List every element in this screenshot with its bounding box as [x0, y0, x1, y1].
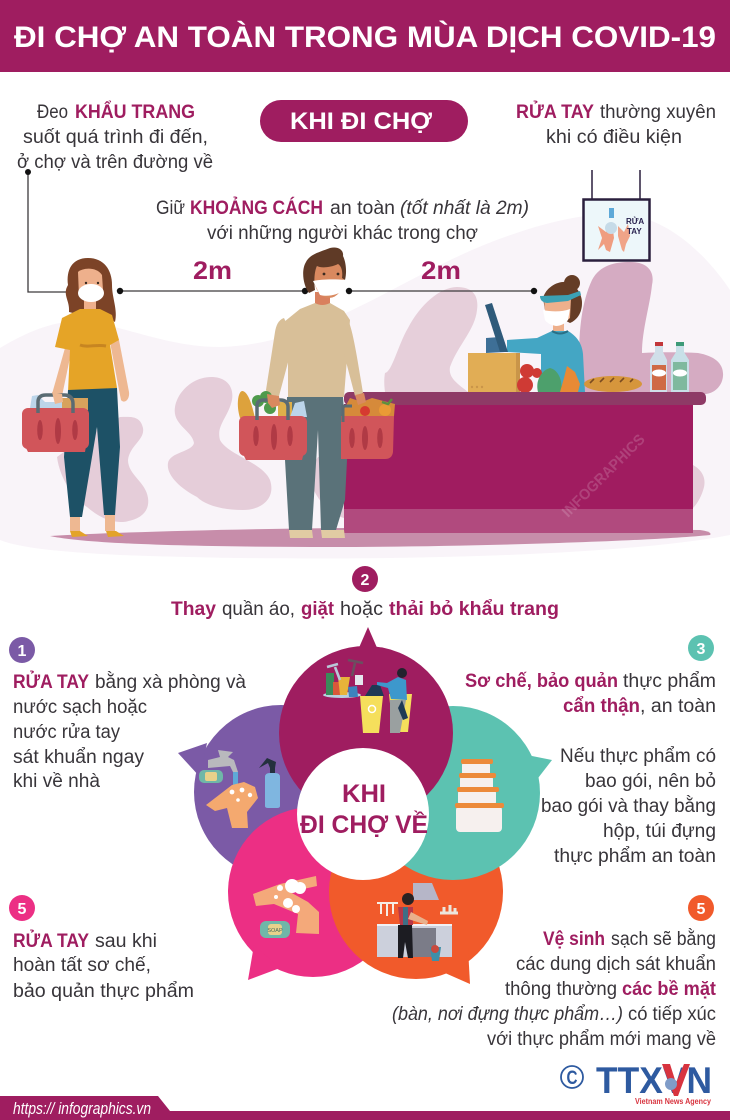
icon: hand washing sign — [584, 170, 650, 260]
text: wear mask: ở chợ và trên đường về — [17, 152, 213, 173]
text block: step 5 clean surfaces — [392, 895, 717, 1050]
center circle label: ĐI CHỢ VỀ — [300, 810, 428, 839]
icon: soapy hands — [253, 876, 319, 938]
petal: purple wash hands — [178, 705, 368, 879]
text block: step 5 wash hands after: sau khi — [95, 931, 157, 952]
text: keep distance — [156, 197, 529, 244]
text: wash hands: RỬA TAY — [516, 101, 594, 123]
heading: change clothes step 2: Thay — [171, 599, 216, 620]
heading: change clothes step 2: thải bỏ khẩu trang — [389, 599, 559, 620]
label: 2m left: 2m — [193, 257, 232, 285]
logo: TTXVN: TTXVN — [596, 1060, 712, 1101]
icon: soapy hands: SOAP — [267, 928, 283, 934]
text: keep distance: an toàn — [330, 198, 395, 219]
text: keep distance: KHOẢNG CÁCH — [190, 197, 323, 219]
icon: trash and person — [323, 660, 412, 733]
text: wash hands: khi có điều kiện — [546, 127, 682, 148]
icon: kitchen cleaning — [377, 883, 458, 961]
label: 2m right: 2m — [421, 257, 461, 285]
illustration: woman with basket — [22, 258, 129, 537]
diagram: five petal flower — [178, 627, 552, 984]
text: keep distance: (tốt nhất là 2m) — [400, 198, 529, 219]
text block: step 1 wash hands: nước rửa tay — [13, 722, 120, 743]
text: wear mask: KHẨU TRANG — [75, 101, 195, 123]
text: wash hands: thường xuyên — [600, 102, 716, 123]
text block: step 3 food prep: thực phẩm an toàn — [554, 846, 716, 867]
pill heading: khi đi chợ — [260, 100, 468, 142]
text block: step 1 wash hands: bằng xà phòng và — [95, 671, 246, 693]
pill heading: khi đi chợ: KHI ĐI CHỢ — [290, 108, 433, 135]
heading: change clothes step 2: quần áo, — [222, 599, 295, 620]
text block: step 3 food prep: bao gói và thay bằng — [541, 795, 716, 817]
text: wear mask — [17, 101, 213, 173]
text block: step 3 food prep: , an toàn — [640, 696, 716, 717]
logo: TTXVN: Vietnam News Agency — [635, 1097, 711, 1106]
text block: step 1 wash hands: nước sạch hoặc — [13, 697, 147, 718]
illustration: cashier — [468, 275, 689, 393]
text block: step 5 wash hands after: hoàn tất sơ chế, — [13, 955, 151, 976]
icon: hand washing sign: TAY — [627, 227, 642, 236]
text block: step 5 clean surfaces: các bề mặt — [622, 979, 717, 1000]
petal: orange cleaning — [329, 805, 503, 984]
center circle label — [297, 748, 429, 880]
text block: step 1 wash hands: 1 — [18, 643, 27, 660]
illustration: market counter — [344, 392, 706, 533]
text block: step 3 food prep — [465, 635, 716, 867]
heading: change clothes step 2: hoặc — [340, 599, 383, 620]
text block: step 3 food prep: thực phẩm — [623, 671, 716, 692]
text block: step 5 clean surfaces: các dung dịch sát khuẩn — [516, 954, 716, 975]
text block: step 5 clean surfaces: Vệ sinh — [543, 929, 605, 950]
icon: tap and soap — [199, 750, 280, 828]
text block: step 5 clean surfaces: (bàn, nơi đựng thực phẩm…) — [392, 1004, 623, 1025]
heading: change clothes step 2 — [171, 566, 559, 620]
text block: step 3 food prep: Sơ chế, bảo quản — [465, 671, 618, 692]
text block: step 1 wash hands: RỬA TAY — [13, 671, 89, 693]
text: wear mask: suốt quá trình đi đến, — [23, 127, 208, 148]
heading: change clothes step 2: giặt — [301, 599, 335, 620]
petal: pink wash hands — [228, 807, 398, 980]
text: keep distance: với những người khác trong chợ — [207, 223, 478, 244]
text block: step 5 clean surfaces: với thực phẩm mới mang về — [487, 1029, 716, 1050]
heading: change clothes step 2: 2 — [361, 572, 370, 589]
icon: hand washing sign: RỬA — [626, 217, 644, 226]
text: keep distance: Giữ — [156, 198, 185, 219]
text block: step 3 food prep: bao gói, nên bỏ — [585, 771, 716, 792]
text block: step 5 wash hands after — [9, 895, 194, 1002]
text block: step 1 wash hands: khi về nhà — [13, 771, 100, 792]
text block: step 1 wash hands — [9, 637, 246, 792]
floor shadow — [50, 528, 711, 547]
title banner — [0, 0, 730, 72]
text block: step 3 food prep: 3 — [697, 641, 706, 658]
petal: maroon dispose — [279, 627, 453, 820]
text block: step 5 clean surfaces: 5 — [697, 901, 706, 918]
text block: step 5 wash hands after: 5 — [18, 901, 27, 918]
text block: step 3 food prep: hộp, túi đựng — [603, 821, 716, 842]
logo: TTXVN — [561, 1060, 712, 1106]
text block: step 3 food prep: cẩn thận — [563, 696, 640, 717]
icon: food containers — [455, 759, 504, 832]
text: wash hands — [516, 101, 716, 148]
illustration: market counter: INFOGRAPHICS — [559, 431, 649, 521]
text block: step 5 clean surfaces: sạch sẽ bằng — [611, 928, 716, 950]
text block: step 3 food prep: Nếu thực phẩm có — [560, 746, 716, 767]
footer bar with url — [0, 1096, 730, 1120]
illustration: man with baskets — [238, 247, 395, 538]
text block: step 1 wash hands: sát khuẩn ngay — [13, 747, 145, 768]
scene background — [0, 214, 730, 558]
text block: step 5 wash hands after: bảo quản thực phẩm — [13, 981, 194, 1002]
text block: step 5 clean surfaces: thông thường — [505, 979, 617, 1000]
distance lines — [25, 169, 537, 294]
text block: step 5 wash hands after: RỬA TAY — [13, 930, 89, 952]
center circle label: KHI — [342, 780, 386, 808]
logo: TTXVN: C — [566, 1068, 578, 1089]
footer bar with url: https:// infographics.vn — [13, 1099, 151, 1118]
text block: step 5 clean surfaces: có tiếp xúc — [628, 1004, 716, 1025]
title banner: ĐI CHỢ AN TOÀN TRONG MÙA DỊCH COVID-19 — [14, 20, 716, 54]
text: wear mask: Đeo — [37, 102, 68, 123]
petal: teal food prep — [366, 706, 552, 880]
